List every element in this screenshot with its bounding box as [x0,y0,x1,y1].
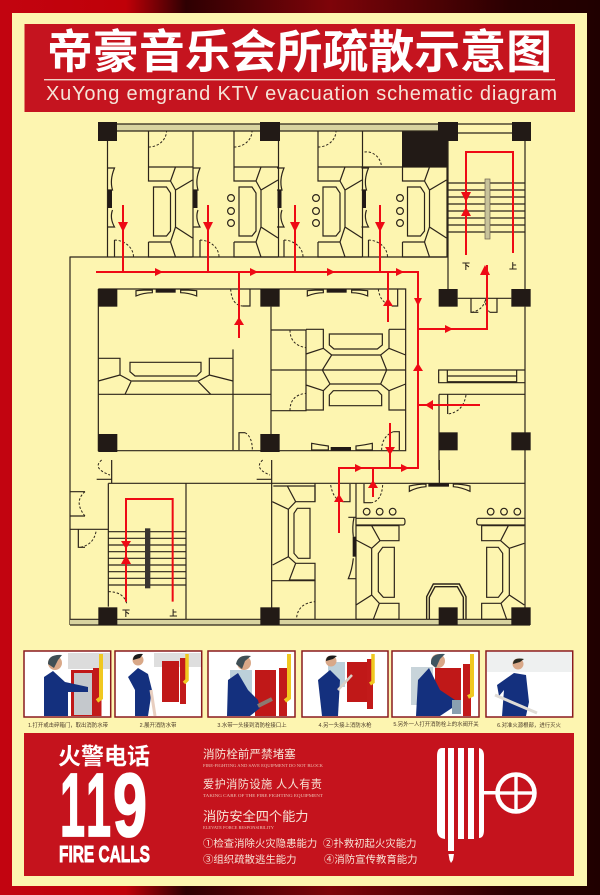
step 4 [302,651,388,729]
step 2 caption: 2.展开消防水带 [140,721,177,729]
step 5 caption: 5.另外一人打开消防栓上的水阀开关 [393,720,479,728]
safety rules text: ③组织疏散逃生能力 [203,853,297,866]
lower block [70,460,531,625]
top wall and columns [70,122,531,625]
step 6 [486,651,573,729]
stair labels: 下 [122,609,130,618]
step illustrations [24,651,573,729]
step 5 [392,651,479,728]
title banner [24,24,575,112]
safety rules text: 消防安全四个能力 [203,808,308,824]
right block [439,289,531,470]
floor plan [70,122,531,625]
phone number: 1 [60,756,85,856]
safety rules text: ④消防宣传教育能力 [324,853,418,866]
top right stair: 上 [509,261,517,271]
bottom fire call panel [24,733,574,876]
phone number [60,755,147,856]
top rooms [108,131,448,257]
safety rules text: FIRE-FIGHTING AND SAVE EQUIPMENT DO NOT BLOCK [203,764,324,768]
step 1 [24,651,111,729]
safety rules text: 爱护消防设施 人人有责 [203,777,322,791]
safety rules text: 消防栓前严禁堵塞 [203,747,296,761]
fire calls label: FIRE CALLS [59,841,150,867]
middle block [98,289,406,452]
red evacuation arrows [96,152,513,602]
safety rules text: ELEVATE FORCE RESPONSIBILITY [203,826,274,830]
top right stair [448,179,525,271]
lower block: 上 [169,608,177,618]
icon: fire hose reel [437,748,534,863]
step 4 caption: 4.另一头接上消防水枪 [318,721,372,729]
phone number: 1 [86,756,111,856]
step 1 caption: 1.打开或击碎箱门，取出消防水带 [28,721,109,729]
safety rules text [203,747,418,866]
phone number: 9 [113,755,147,856]
safety rules text: TAKING CARE OF THE FIRE FIGHTING EQUIPMENT [203,794,324,798]
subtitle: XuYong emgrand KTV evacuation schematic diagram [46,83,557,105]
step 6 caption: 6.对准火源根部，进行灭火 [497,721,562,729]
step 3 caption: 3.水带一头接到消防栓接口上 [217,721,287,729]
step 2 [115,651,202,729]
fire call heading: 火警电话 [58,743,150,769]
title: 帝豪音乐会所疏散示意图 [47,27,552,78]
stair labels: 下 [462,262,470,271]
safety rules text: ②扑救初起火灾能力 [323,837,417,850]
safety rules text: ①检查消除火灾隐患能力 [203,837,317,850]
step 3 [208,651,295,729]
